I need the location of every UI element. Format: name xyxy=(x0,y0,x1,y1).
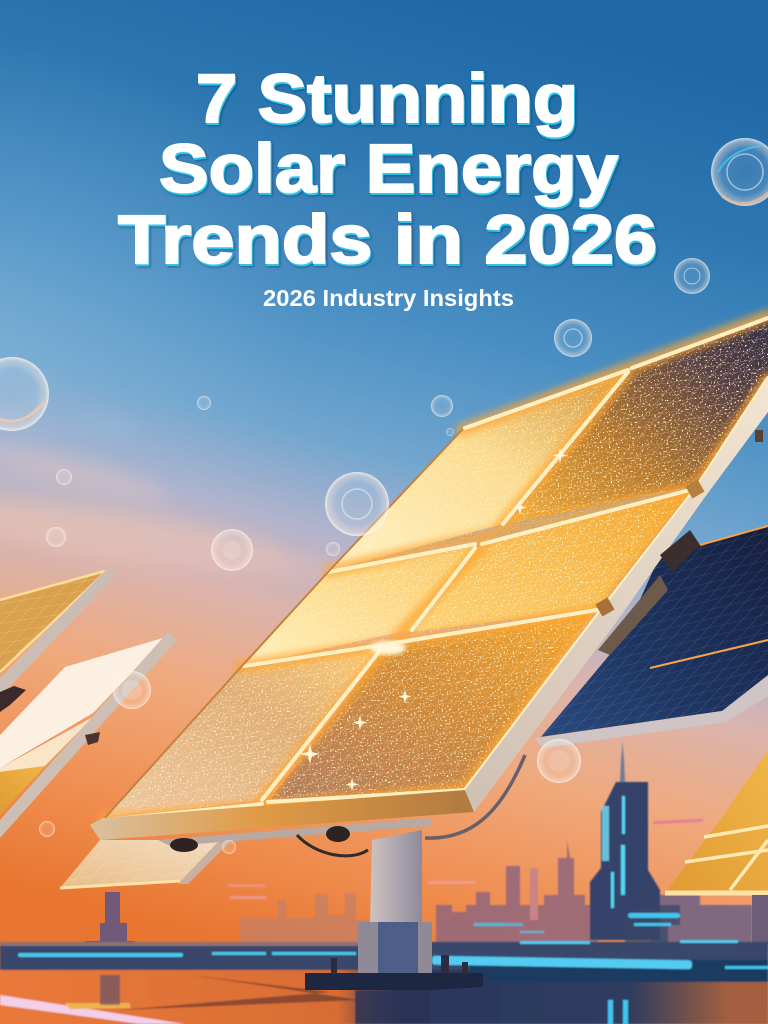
left upper solar panel xyxy=(0,568,118,712)
cell grid and speckle xyxy=(90,310,768,830)
title xyxy=(118,60,657,278)
glowing seams xyxy=(103,316,768,820)
star sparkles xyxy=(300,448,568,791)
panel frame bottom xyxy=(90,790,474,840)
cables and mount brackets xyxy=(170,430,763,856)
left lower solar panel xyxy=(0,632,177,838)
bubbles in front of panels xyxy=(39,472,581,854)
panel cells xyxy=(103,316,768,820)
title: Trends in 2026 xyxy=(118,201,657,278)
right rear dark solar panel xyxy=(530,520,768,748)
title: 7 Stunning xyxy=(196,60,578,137)
right foreground solar panel xyxy=(665,750,768,945)
panel frame side xyxy=(465,378,768,812)
main futuristic tower xyxy=(590,742,660,940)
mounting rail xyxy=(158,818,432,846)
subtitle: 2026 Industry Insights xyxy=(263,285,514,311)
glare at panel centre xyxy=(370,641,406,655)
sky light on left xyxy=(0,0,320,640)
floor and reflections xyxy=(0,940,768,1024)
small rear solar panel xyxy=(60,840,230,946)
main panel support post xyxy=(305,830,483,990)
clouds xyxy=(0,413,341,586)
distant city skyline xyxy=(228,742,752,945)
title: Solar Energy xyxy=(159,130,618,207)
bubbles behind panels xyxy=(0,138,768,556)
main solar panel xyxy=(90,310,768,846)
